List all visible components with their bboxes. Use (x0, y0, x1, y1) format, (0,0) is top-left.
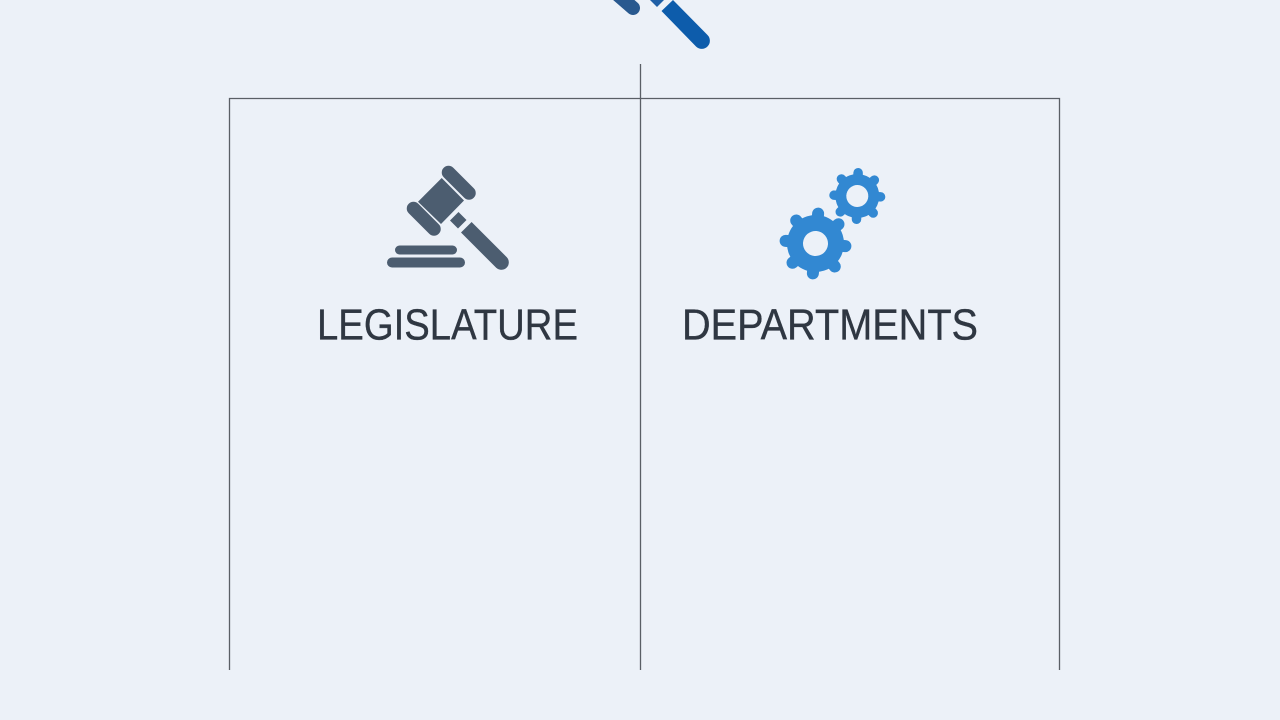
icon: gavel (387, 172, 509, 270)
small gear (833, 172, 881, 220)
heading: departments: DEPARTMENTS (682, 300, 978, 350)
heading: legislature: LEGISLATURE (317, 300, 578, 350)
icon: cropped blue gavel at top (610, 0, 710, 49)
panel: legislature (317, 172, 578, 350)
icon: gears (783, 172, 881, 276)
comparison table outline (230, 64, 1060, 670)
panel: departments (682, 172, 978, 350)
large gear (783, 211, 848, 276)
